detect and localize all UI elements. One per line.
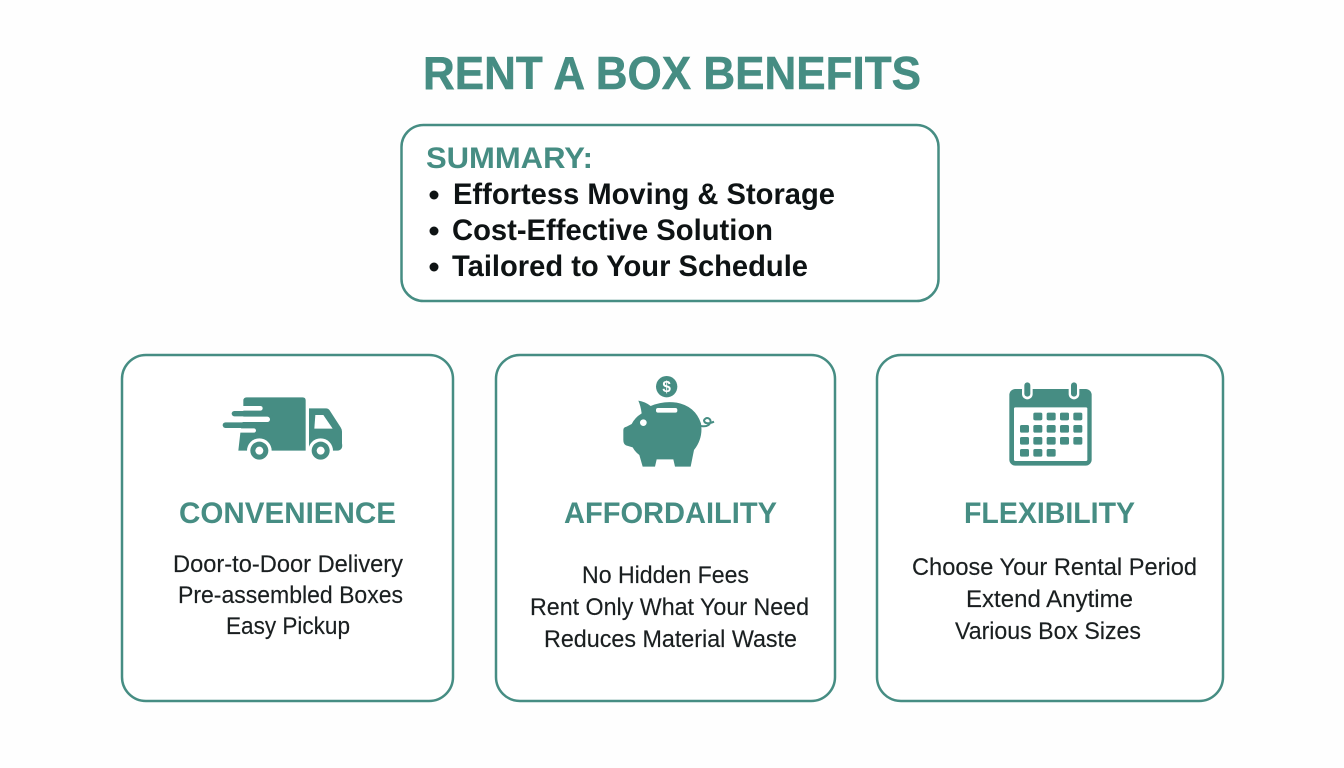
text: affordability list: Rent Only What Your Need bbox=[530, 594, 809, 621]
icon: piggy bank bbox=[623, 376, 714, 467]
summary bullet: moving: Effortess Moving & Storage bbox=[453, 178, 835, 211]
panel: affordability bbox=[496, 355, 835, 701]
heading: affordaility: AFFORDAILITY bbox=[564, 497, 777, 530]
text: flexibility list: Extend Anytime bbox=[966, 586, 1133, 613]
text: convenience list: Easy Pickup bbox=[226, 613, 350, 640]
text: convenience list: Pre-assembled Boxes bbox=[178, 582, 403, 609]
text: flexibility list bbox=[912, 554, 1197, 645]
icon: calendar bbox=[1009, 380, 1092, 466]
text: convenience list bbox=[173, 551, 403, 640]
icon: piggy bank: $ bbox=[662, 379, 671, 396]
text: affordability list bbox=[530, 562, 809, 653]
text: affordability list: Reduces Material Waste bbox=[544, 626, 797, 653]
text: flexibility list: Various Box Sizes bbox=[955, 618, 1141, 645]
heading: flexibility: FLEXIBILITY bbox=[964, 497, 1135, 530]
panel: flexibility bbox=[877, 355, 1223, 701]
summary heading: SUMMARY: bbox=[426, 142, 593, 175]
icon: delivery truck bbox=[220, 397, 342, 463]
panel: convenience bbox=[122, 355, 453, 701]
panel: summary bbox=[402, 125, 938, 301]
title: RENT A BOX BENEFITS bbox=[423, 47, 921, 99]
heading: convenience: CONVENIENCE bbox=[179, 497, 396, 530]
text: affordability list: No Hidden Fees bbox=[582, 562, 749, 589]
text: convenience list: Door-to-Door Delivery bbox=[173, 551, 403, 578]
summary bullet: cost: Cost-Effective Solution bbox=[452, 214, 773, 247]
text: flexibility list: Choose Your Rental Period bbox=[912, 554, 1197, 581]
summary bullet: schedule: Tailored to Your Schedule bbox=[452, 250, 808, 283]
